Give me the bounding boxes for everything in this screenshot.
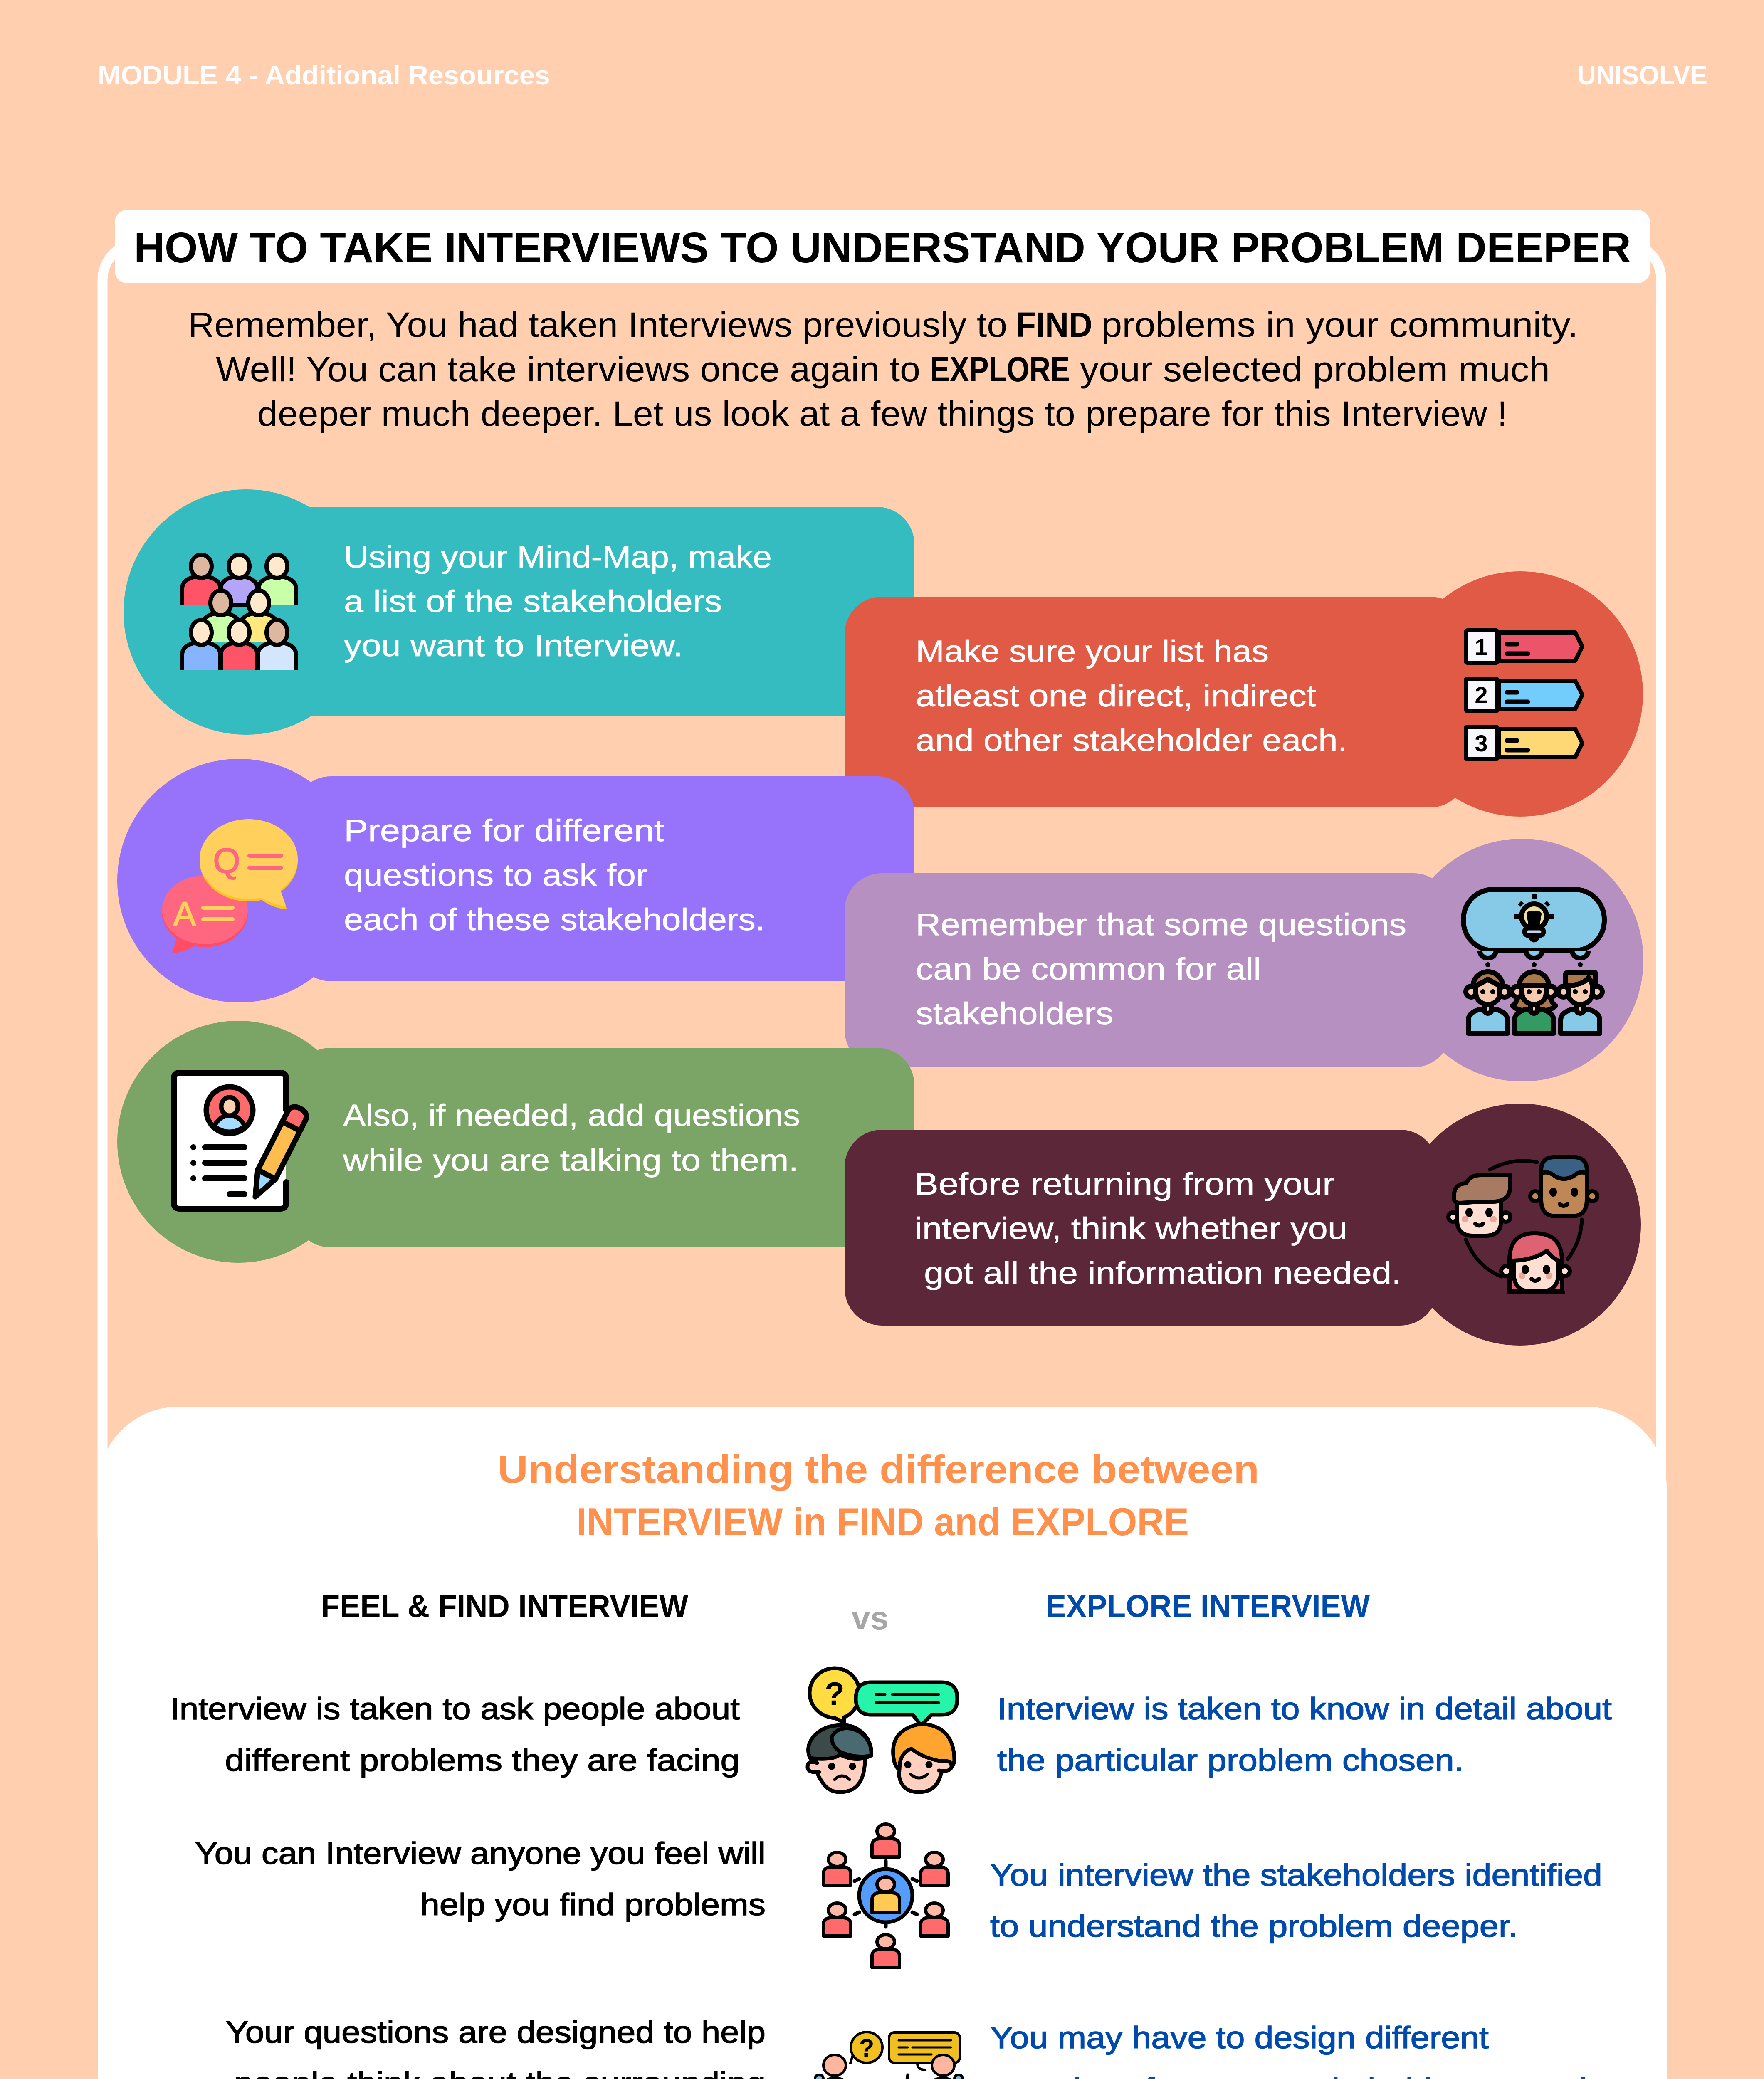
icon: stakeholder network	[823, 1824, 948, 1968]
right text: row 3: You may have to design different	[990, 2020, 1489, 2055]
card text: Remember that some questions	[916, 907, 1406, 942]
icon: group with shared idea	[1463, 889, 1604, 1033]
intro paragraph: deeper much deeper. Let us look at a few things to prepare for this Interview !	[257, 394, 1507, 433]
icon: numbered list: 3	[1475, 730, 1488, 756]
card text: interview, think whether you	[914, 1211, 1347, 1246]
card text	[344, 540, 772, 663]
card text: can be common for all	[916, 952, 1261, 986]
icon: interview at a table: ?	[859, 2034, 874, 2062]
white frame outline	[102, 243, 1661, 1538]
column heading: explore: EXPLORE INTERVIEW	[1046, 1589, 1370, 1624]
right text: row 1	[997, 1691, 1612, 1778]
intro paragraph: problems in your community.	[1101, 305, 1578, 344]
icon: numbered list: 1	[1475, 634, 1488, 660]
panel: find vs explore comparison	[98, 1407, 1667, 2079]
icon: two people talking: ?	[825, 1675, 845, 1712]
card text	[916, 907, 1406, 1031]
column heading: feel and find: FEEL & FIND INTERVIEW	[321, 1589, 688, 1624]
icon: document and pencil	[174, 1073, 309, 1209]
card text: Using your Mind-Map, make	[344, 540, 772, 574]
card text	[914, 1167, 1401, 1290]
icon: crowd of people	[182, 555, 296, 670]
card text: you want to Interview.	[344, 628, 683, 663]
icon: numbered list	[1466, 630, 1582, 759]
card: stakeholders list (teal)	[124, 489, 914, 735]
title banner	[115, 210, 1650, 283]
card text: Make sure your list has	[916, 634, 1269, 669]
right text: row 2	[990, 1858, 1602, 1943]
right text: row 1: Interview is taken to know in detail about	[997, 1691, 1612, 1726]
intro paragraph: EXPLORE	[930, 350, 1070, 389]
card text: stakeholders	[916, 996, 1113, 1031]
card text: got all the information needed.	[924, 1256, 1401, 1290]
intro paragraph	[188, 305, 1578, 433]
title banner: HOW TO TAKE INTERVIEWS TO UNDERSTAND YOUR PROBLEM DEEPER	[134, 224, 1631, 272]
card text: each of these stakeholders.	[344, 902, 765, 937]
icon: two people talking	[808, 1668, 957, 1792]
icon: numbered list: 2	[1475, 682, 1488, 708]
card text: Prepare for different	[344, 813, 665, 848]
left text: row 2	[195, 1836, 766, 1922]
card text: while you are talking to them.	[343, 1143, 798, 1178]
card text: and other stakeholder each.	[916, 723, 1347, 758]
intro paragraph: FIND	[1016, 305, 1092, 344]
icon: question and answer bubbles	[162, 819, 298, 953]
card text: a list of the stakeholders	[344, 584, 722, 619]
icon: three faces connected	[1448, 1157, 1597, 1292]
card: common questions (mauve)	[845, 839, 1643, 1081]
panel heading	[498, 1447, 1259, 1543]
card text: Also, if needed, add questions	[343, 1098, 800, 1133]
card: different questions (purple)	[117, 759, 914, 1002]
right text: row 3	[990, 2020, 1598, 2079]
header: brand: UNISOLVE	[1577, 60, 1707, 90]
card: add questions while talking (green)	[117, 1021, 914, 1263]
card: stakeholder types (red)	[845, 571, 1643, 817]
icon: interview at a table	[814, 2032, 964, 2079]
right text: row 2: to understand the problem deeper.	[990, 1909, 1518, 1943]
panel heading: INTERVIEW in FIND and EXPLORE	[576, 1500, 1189, 1543]
card: review before returning (maroon)	[845, 1104, 1641, 1346]
right text: row 1: the particular problem chosen.	[997, 1743, 1464, 1778]
intro paragraph: Remember, You had taken Interviews previously to	[188, 305, 1007, 344]
left text: row 3: Your questions are designed to help	[226, 2015, 766, 2049]
vs label: vs	[852, 1600, 889, 1636]
panel heading: Understanding the difference between	[498, 1447, 1259, 1491]
icon: question and answer bubbles: A	[173, 895, 196, 933]
card text: atleast one direct, indirect	[916, 679, 1316, 713]
left text: row 1	[170, 1691, 740, 1778]
card text: Before returning from your	[914, 1167, 1334, 1201]
card text	[344, 813, 765, 937]
left text: row 2: You can Interview anyone you feel will	[195, 1836, 766, 1871]
card text: questions to ask for	[344, 858, 647, 892]
icon: question and answer bubbles: Q	[213, 841, 240, 880]
intro paragraph: Well! You can take interviews once again to	[216, 350, 920, 389]
intro paragraph: your selected problem much	[1080, 350, 1550, 389]
left text: row 1: Interview is taken to ask people about	[170, 1691, 740, 1726]
left text: row 2: help you find problems	[420, 1887, 766, 1922]
left text: row 3	[178, 2015, 766, 2079]
right text: row 2: You interview the stakeholders identified	[990, 1858, 1602, 1892]
left text: row 1: different problems they are facing	[225, 1743, 740, 1778]
card text	[916, 634, 1347, 758]
card text	[343, 1098, 800, 1178]
header: module label: MODULE 4 - Additional Resources	[98, 60, 550, 90]
